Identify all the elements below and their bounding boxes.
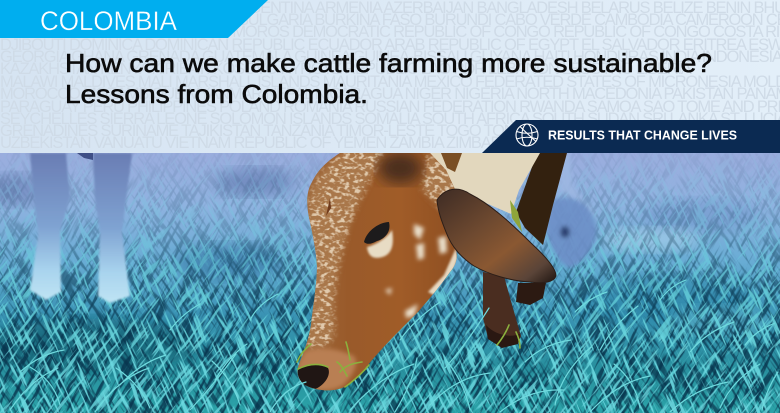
grass field [0, 153, 780, 413]
title: Lessons from Colombia. [65, 79, 368, 109]
foreground light grass blades [10, 280, 778, 412]
cow back legs and body [425, 153, 567, 348]
muzzle [297, 349, 356, 390]
mottled white coat [306, 153, 454, 350]
country tag: COLOMBIA: COLOMBIA [40, 6, 177, 36]
green grass in mouth [297, 325, 520, 387]
icon: globe [516, 124, 538, 146]
white spots [385, 224, 447, 318]
background: country names pattern: GRENADINES SURINAME TAJIKISTAN TANZANIA TIMOR-LESTE TOGO TONGA TUNISIA [0, 122, 596, 140]
title: How can we make cattle farming more sustainable? [65, 48, 712, 78]
background: country names pattern: UZBEKISTAN VANUATU VIETNAM REPUBLIC OF YEMEN ZAMBIA ZIMBABWE [0, 134, 526, 152]
icon: eye [364, 222, 390, 244]
icon: nose [298, 364, 329, 390]
cow ear [437, 189, 556, 283]
eye patch [367, 230, 393, 258]
badge: results that change lives: RESULTS THAT CHANGE LIVES [548, 128, 737, 142]
badge: results that change lives [482, 120, 780, 153]
photo: cow grazing on tinted grass [0, 152, 780, 413]
country tag: COLOMBIA [0, 0, 268, 38]
far cow legs left [30, 153, 132, 303]
title [65, 48, 712, 109]
background: country names pattern [0, 0, 780, 153]
background: country names pattern: KAZAKHSTAN KENYA KIRIBATI KOSOVO KYRGYZ REPUBLIC LAO PDR LEBANON LESOTHO LIBERIA [0, 60, 692, 78]
tan blaze under mottling [306, 153, 454, 347]
cow head [298, 153, 457, 390]
calf in background right [546, 153, 598, 268]
